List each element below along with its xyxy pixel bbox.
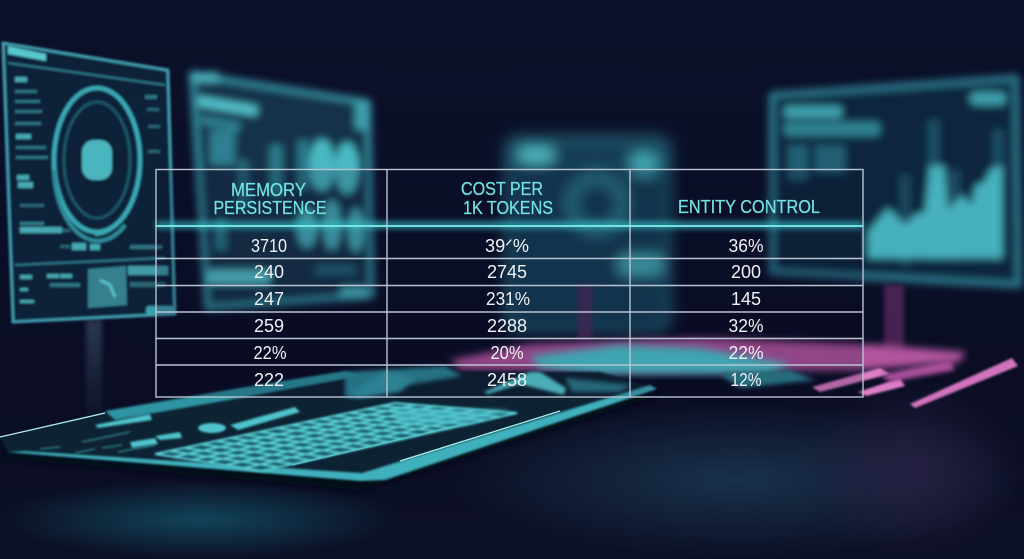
column values: memory persistence: 259	[254, 316, 284, 336]
pink and cyan light surface	[450, 338, 1018, 408]
column values: cost per 1k tokens: 39ᐟ%	[485, 236, 529, 256]
second monitor	[190, 72, 372, 308]
table grid	[156, 169, 863, 397]
column heading: entity control: ENTITY CONTROL	[678, 197, 820, 217]
column values: entity control: 32%	[728, 316, 764, 336]
left monitor stand	[86, 320, 102, 420]
header divider	[156, 225, 863, 227]
table darkening overlay	[156, 169, 863, 397]
center monitor	[507, 138, 669, 330]
column values: cost per 1k tokens: 2458	[487, 370, 527, 390]
column values: entity control: 36%	[728, 236, 764, 256]
column heading line two: persistence: PERSISTENCE	[214, 198, 326, 218]
column values: cost per 1k tokens: 2745	[487, 262, 527, 282]
column values: memory persistence: 240	[254, 262, 284, 282]
column values: cost per 1k tokens: 231%	[486, 289, 530, 309]
column values: entity control: 145	[731, 289, 761, 309]
left monitor	[3, 43, 175, 322]
center monitor stand	[578, 285, 592, 340]
column values: memory persistence: 222	[254, 370, 284, 390]
column heading: cost per: COST PER	[461, 179, 543, 199]
right monitor	[772, 78, 1019, 285]
column values: memory persistence: 3710	[251, 236, 287, 256]
column values: memory persistence: 247	[254, 289, 284, 309]
header glow band	[156, 221, 863, 229]
column values: entity control: 12%	[730, 370, 762, 390]
comparison table	[156, 169, 863, 397]
column values: memory persistence: 22%	[254, 343, 286, 363]
column values: entity control	[728, 236, 764, 390]
column values: cost per 1k tokens	[485, 236, 530, 390]
column values: memory persistence	[251, 236, 287, 390]
column values: cost per 1k tokens: 20%	[490, 343, 524, 363]
column values: entity control: 22%	[728, 343, 764, 363]
keyboard shadow	[0, 389, 660, 490]
keys	[155, 403, 517, 471]
keyboard edge highlights	[400, 411, 560, 461]
right monitor stand	[884, 285, 904, 350]
column values: cost per 1k tokens: 2288	[487, 316, 527, 336]
column values: entity control: 200	[731, 262, 761, 282]
keyboard	[0, 366, 660, 490]
column heading line two: 1K tokens: 1K TOKENS	[463, 198, 553, 218]
column heading: memory: MEMORY	[231, 180, 306, 200]
